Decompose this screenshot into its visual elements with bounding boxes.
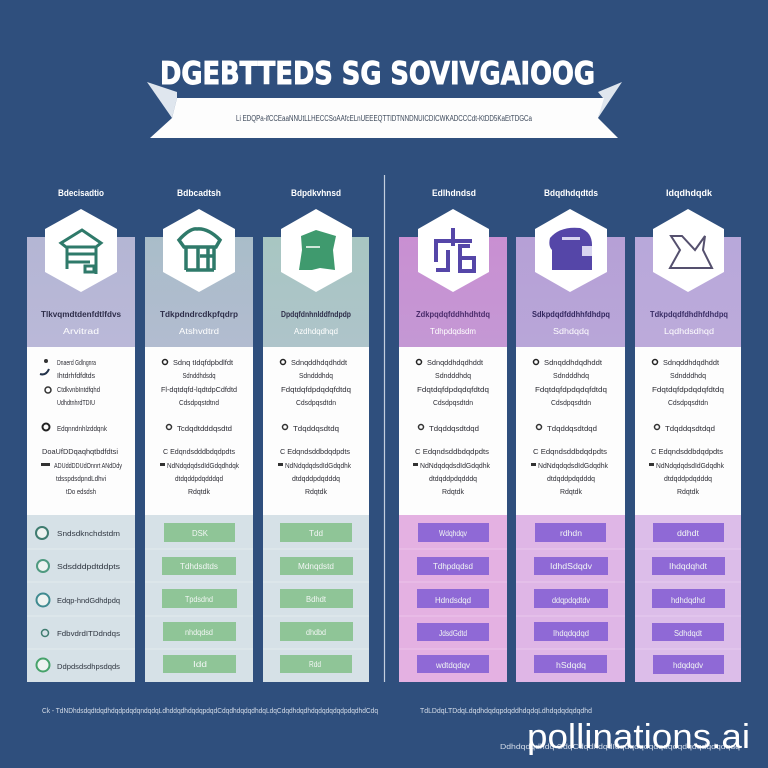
column 5 list: Sdnqddhdqdhddt xyxy=(544,358,603,367)
column 2 list: Sdnddhdsdq xyxy=(182,371,216,380)
column 1 xyxy=(27,188,135,682)
column 1 list: Dnaerd Gdlngnra xyxy=(57,358,97,367)
column 2 list: Tcdqdtdddqsdtd xyxy=(177,424,232,433)
column 5 comparison rows xyxy=(516,515,625,682)
column 6 list: Rdqtdk xyxy=(677,487,699,496)
column 3 list: dtdqddpdqdddq xyxy=(292,474,340,483)
column 5 header panel xyxy=(516,237,625,347)
column 1 list: DoaUfDDqaqhqtbdfdtsi xyxy=(42,447,118,456)
column 3 list: Cdsdpqsdtdn xyxy=(296,398,336,407)
column 6 hexagon icon xyxy=(653,209,724,292)
column 5 comparison rows: IdhdSdqdv xyxy=(550,562,592,571)
column 5 xyxy=(516,188,625,682)
column 4 list: dtdqddpdqdddq xyxy=(429,474,477,483)
column 3 comparison rows: Rdd xyxy=(309,660,321,669)
column 3 comparison rows: Mdnqdstd xyxy=(298,562,334,571)
column 4 list xyxy=(413,358,490,496)
column 1 header panel xyxy=(27,237,135,347)
column 6: Lqdhdsdhqd xyxy=(664,327,714,336)
column 3 header text: Dpdqfdnhnlddfndpdp xyxy=(281,309,351,319)
column 4 comparison rows: wdtdqdqv xyxy=(435,661,470,670)
column 3 heading: Bdpdkvhnsd xyxy=(291,188,341,198)
column 5 comparison rows: Ihdqdqdqd xyxy=(553,629,589,638)
column 6 comparison rows: Ihdqdqhdt xyxy=(669,562,708,571)
column 1 heading: Bdecisadtio xyxy=(58,188,104,198)
column 4: Tdhpdqdsdm xyxy=(430,327,476,336)
column 2 list: Rdqtdk xyxy=(188,487,210,496)
column 4 list: Fdqtdqfdpdqdqfdtdq xyxy=(417,385,489,394)
column 6 header panel xyxy=(635,237,741,347)
column 2 list xyxy=(160,358,239,496)
column 2 list: Sdnq tIdqfdpbdlfdt xyxy=(173,358,234,367)
column 3 list: NdNdqdqdsdIdGdqdhk xyxy=(285,461,351,470)
subtitle: Li EDQPa-ifCCEaaNNUtLLHECCSoAAfcELnUEEEQTTIDTNNDNUICDICWKADCCCdt-KtDD5KaEtTDGCa xyxy=(236,114,532,123)
column 4 comparison rows xyxy=(399,515,507,682)
column 1 comparison rows: FdbvdrdITDdndqs xyxy=(57,629,120,638)
column 5 list: Tdqddqsdtdqd xyxy=(547,424,597,433)
column 6 heading: Idqdhdqdk xyxy=(666,188,713,198)
column 3 comparison rows xyxy=(263,515,369,682)
column 2 xyxy=(145,188,253,682)
column 1 comparison rows xyxy=(27,515,135,682)
column 6 list: dtdqddpdqdddq xyxy=(664,474,712,483)
column 3 xyxy=(263,188,369,682)
column 4 comparison rows: Wdqhdqv xyxy=(439,529,467,538)
column 4 list: Sdndddhdq xyxy=(435,371,471,380)
center divider xyxy=(384,175,386,682)
column 6 comparison rows: hdhdqdhd xyxy=(671,596,705,605)
column 3 list xyxy=(278,358,351,496)
column 3 header panel xyxy=(263,237,369,347)
column 4 hexagon icon xyxy=(418,209,489,292)
column 5 comparison rows: ddqpdqdtdv xyxy=(552,596,590,605)
column 1 list: ADUddDDUdOnnrt ANdDdy xyxy=(54,461,122,470)
column 6 list: Sdnqddhdqdhddt xyxy=(663,358,720,367)
column 2 list: Cdsdpqstdtnd xyxy=(179,398,219,407)
column 2 heading: Bdbcadtsh xyxy=(177,188,221,198)
column 1 header text: Tlkvqmdtdenfdtlfdvs xyxy=(41,309,121,319)
column 2 comparison rows: nhdqdsd xyxy=(185,628,213,637)
column 6 xyxy=(635,188,741,682)
column 1 white list panel xyxy=(27,347,135,515)
column 3 list: C Edqndsddbdqdpdts xyxy=(280,447,350,456)
watermark: pollinations.ai xyxy=(527,718,750,756)
column 2 white list panel xyxy=(145,347,253,515)
column 5 list: Fdqtdqfdpdqdqfdtdq xyxy=(535,385,607,394)
column 5 list: Rdqtdk xyxy=(560,487,582,496)
column 1 comparison rows: Ddpdsdsdhpsdqds xyxy=(57,662,120,671)
column 5 list xyxy=(531,358,608,496)
column 2 list: Fl-dqtdqfd-lqdtdpCdfdtd xyxy=(161,385,237,394)
column 6 list: C Edqndsddbdqdpdts xyxy=(651,447,723,456)
column 6 list: Fdqtdqfdpdqdqfdtdq xyxy=(652,385,724,394)
column 5 header text: Sdkpdqdfddhhfdhdpq xyxy=(532,309,610,319)
column 6 comparison rows: hdqdqdv xyxy=(673,661,703,670)
title ribbon banner xyxy=(147,82,622,138)
column 3 list: Sdndddhdq xyxy=(299,371,333,380)
footnote left: Ck - TdNDhdsdqdtdqdhdqdpdqdqndqdqLdhddqdhdqdqpdqdCdqdhdqdqdhdqLdqCdqdhdqdhdqdqdqdqdpdqdhdCdq xyxy=(42,708,378,715)
column 1 list: Edqnndnhlzddqnk xyxy=(57,424,107,433)
column 3 list: Fdqtdqfdpdqdqfdtdq xyxy=(281,385,351,394)
column 3 white list panel xyxy=(263,347,369,515)
column 3 list: Sdnqddhdqdhddt xyxy=(291,358,348,367)
column 1 list: UdhdtnhrdTDIU xyxy=(57,398,95,407)
column 3 comparison rows: Tdd xyxy=(309,529,323,538)
column 5 list: NdNdqdqdsdIdGdqdhk xyxy=(538,461,608,470)
column 3 list: Tdqddqsdtdq xyxy=(293,424,339,433)
title: DGEBTTEDS SG SOVIVGAIOOG xyxy=(160,56,595,92)
column 1 list: tdsspdsdpndLdhvi xyxy=(56,474,106,483)
column 4 comparison rows: Hdndsdqd xyxy=(435,596,471,605)
column 6 header text: Tdkpdqdfdhdhfdhdpq xyxy=(650,309,728,319)
column 3: Azdhdqdhqd xyxy=(294,327,338,336)
column 4 list: Cdsdpqsdtdn xyxy=(433,398,473,407)
column 5 comparison rows: hSdqdq xyxy=(556,661,586,670)
column 2 list: NdNdqdqdsdIdGdqdhdqk xyxy=(167,461,239,470)
column 5 list: Sdndddhdq xyxy=(553,371,589,380)
column 5 heading: Bdqdhdqdtds xyxy=(544,188,598,198)
column 2: Atshvdtrd xyxy=(179,327,219,336)
column 4 comparison rows: Tdhpdqdsd xyxy=(433,562,473,571)
column 3 comparison rows: Bdhdt xyxy=(306,595,327,604)
column 4 list: Sdnqddhdqdhddt xyxy=(427,358,484,367)
column 2 list: C Edqndsdddbdqdpdts xyxy=(163,447,235,456)
column 6 comparison rows: ddhdt xyxy=(677,529,700,538)
column 5 list: dtdqddpdqdddq xyxy=(547,474,595,483)
column 4 list: Tdqddqsdtdqd xyxy=(429,424,479,433)
column 4 comparison rows: JdsdGdtd xyxy=(439,629,467,638)
column 2 comparison rows xyxy=(145,515,253,682)
column 2 comparison rows: Tpdsdnd xyxy=(185,595,213,604)
column 2 list: dtdqddpdqdddqd xyxy=(175,474,223,483)
column 1 comparison rows: Edqp-hndGdhdpdq xyxy=(57,596,120,605)
column 4 white list panel xyxy=(399,347,507,515)
column 6 white list panel xyxy=(635,347,741,515)
column 5 comparison rows: rdhdn xyxy=(560,529,582,538)
column 1 list xyxy=(40,358,122,496)
column 4 header text: Zdkpqdqfddhhdhtdq xyxy=(416,309,490,319)
column 1 list: Ihtdrhfdfdtds xyxy=(57,371,95,380)
column 5 list: Cdsdpqsdtdn xyxy=(551,398,591,407)
column 1 list: CtdkvnbIntdfqhd xyxy=(57,385,100,394)
column 1 comparison rows: Sdsdddpdtddpts xyxy=(57,562,120,571)
column 2 comparison rows: Tdhdsdtds xyxy=(180,562,218,571)
column 6 comparison rows xyxy=(635,515,741,682)
column 6 list: NdNdqdqdsdIdGdqdhk xyxy=(656,461,724,470)
column 6 comparison rows: Sdhdqdt xyxy=(674,629,703,638)
column 5: Sdhdqdq xyxy=(553,327,589,336)
column 2 comparison rows: DSK xyxy=(192,529,209,538)
column 6 list xyxy=(649,358,724,496)
column 1: Arvitrad xyxy=(63,327,99,336)
column 6 list: Cdsdpqsdtdn xyxy=(668,398,708,407)
column 4 header panel xyxy=(399,237,507,347)
column 6 list: Tdqddqsdtdqd xyxy=(665,424,715,433)
column 2 comparison rows: Idd xyxy=(193,660,207,669)
column 3 list: Rdqtdk xyxy=(305,487,327,496)
footnote right: TdLDdqLTDdqLdqdhdqdqpdqddhdqdqLdhdqdqdqdqdhd xyxy=(420,708,592,715)
column 6 list: Sdndddhdq xyxy=(670,371,706,380)
footnote right second line: Ddhdqdqdhdq CdqCdqdhdqdIdqdqdqdqdqdqdqdqdqdqdqdqdq xyxy=(500,744,740,751)
column 2 hexagon icon xyxy=(163,209,235,292)
column 2 header panel xyxy=(145,237,253,347)
column 3 hexagon icon xyxy=(281,209,352,292)
column 5 white list panel xyxy=(516,347,625,515)
column 4 list: C Edqndsddbdqdpdts xyxy=(415,447,489,456)
column 5 list: C Edqndsddbdqdpdts xyxy=(533,447,607,456)
column 1 list: tDo edsdsh xyxy=(66,487,96,496)
column 3 comparison rows: dhdbd xyxy=(306,628,326,637)
column 2 header text: Tdkpdndrcdkpfqdrp xyxy=(160,309,238,319)
column 1 hexagon icon xyxy=(45,209,117,292)
column 4 list: Rdqtdk xyxy=(442,487,464,496)
column 5 hexagon icon xyxy=(535,209,607,292)
column 1 comparison rows: Sndsdknchdstdm xyxy=(57,529,120,538)
column 4 xyxy=(399,188,507,682)
column 4 heading: Edlhdndsd xyxy=(432,188,476,198)
column 4 list: NdNdqdqdsdIdGdqdhk xyxy=(420,461,490,470)
